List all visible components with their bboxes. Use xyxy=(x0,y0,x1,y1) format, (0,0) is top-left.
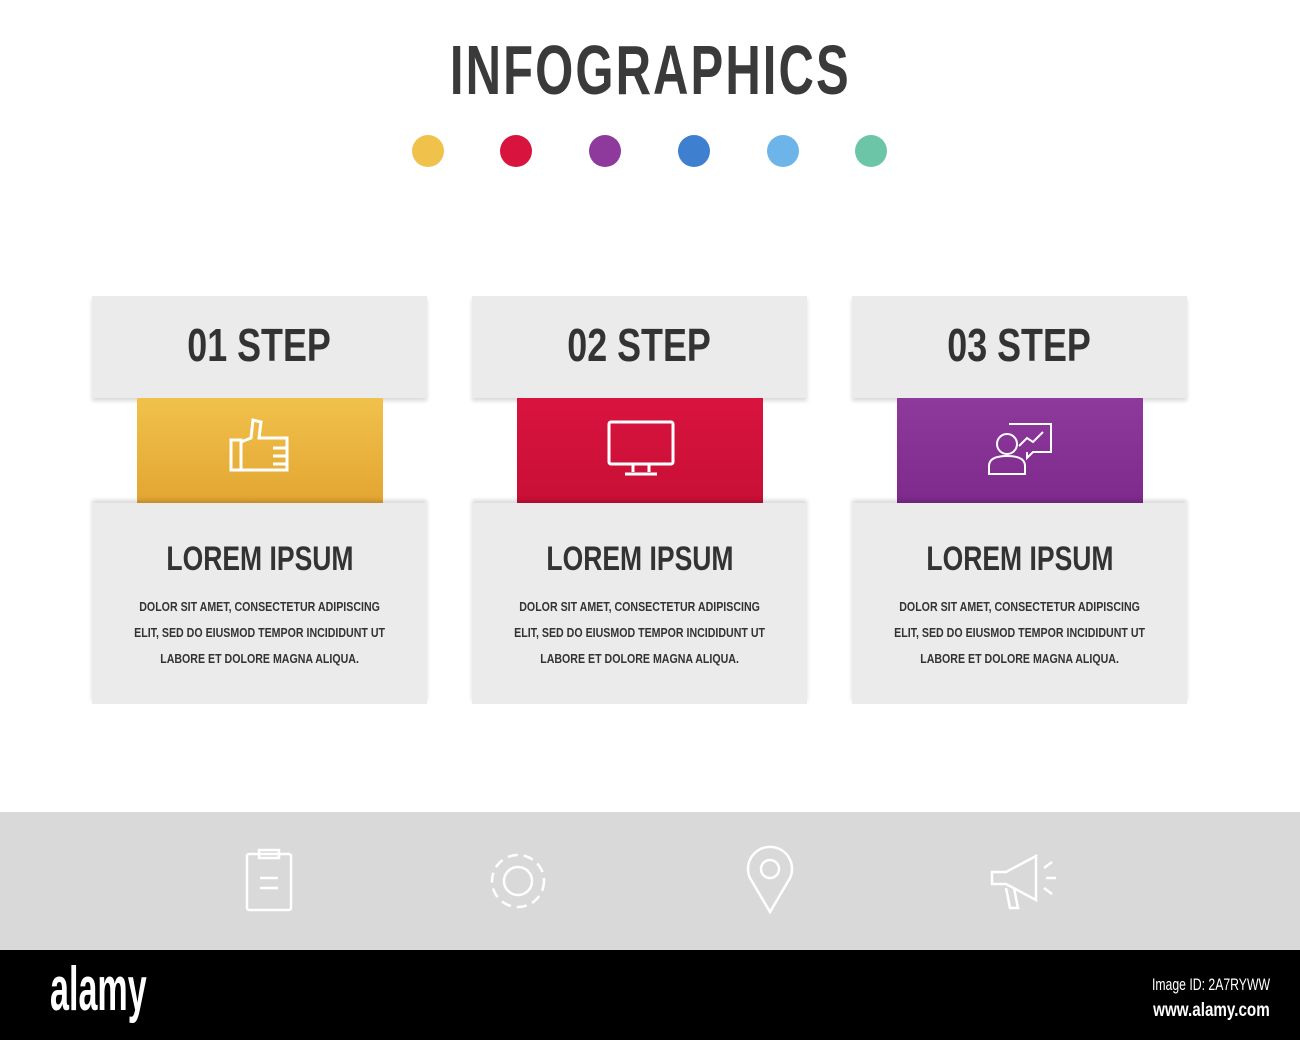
band purple xyxy=(897,398,1143,503)
heading: 03 STEP xyxy=(948,319,1091,371)
icon: gear xyxy=(492,855,544,907)
image id xyxy=(1152,975,1270,1021)
footer xyxy=(0,950,1300,1040)
icon: megaphone xyxy=(992,856,1056,908)
panel: step 2 xyxy=(470,296,808,704)
subheading: LOREM IPSUM xyxy=(546,540,733,578)
band red xyxy=(517,398,763,503)
text: LABORE ET DOLORE MAGNA ALIQUA. xyxy=(540,652,739,666)
colour dots xyxy=(412,135,887,167)
panel: step 3 xyxy=(850,296,1188,704)
text xyxy=(894,600,1145,666)
panel: step 1 xyxy=(90,296,428,704)
heading: 01 STEP xyxy=(188,319,331,371)
icon: clipboard xyxy=(247,850,291,910)
text: DOLOR SIT AMET, CONSECTETUR ADIPISCING xyxy=(139,600,380,614)
text xyxy=(514,600,765,666)
text: DOLOR SIT AMET, CONSECTETUR ADIPISCING xyxy=(519,600,760,614)
band yellow xyxy=(137,398,383,503)
subheading: LOREM IPSUM xyxy=(926,540,1113,578)
logo: alamy xyxy=(50,955,147,1024)
text: ELIT, SED DO EIUSMOD TEMPOR INCIDIDUNT UT xyxy=(514,626,765,640)
title: INFOGRAPHICS xyxy=(450,31,850,109)
subheading: LOREM IPSUM xyxy=(166,540,353,578)
text xyxy=(134,600,385,666)
image id: Image ID: 2A7RYWW xyxy=(1152,975,1270,994)
text: ELIT, SED DO EIUSMOD TEMPOR INCIDIDUNT UT xyxy=(894,626,1145,640)
image id: www.alamy.com xyxy=(1153,1000,1270,1021)
heading: 02 STEP xyxy=(568,319,711,371)
text: LABORE ET DOLORE MAGNA ALIQUA. xyxy=(920,652,1119,666)
text: DOLOR SIT AMET, CONSECTETUR ADIPISCING xyxy=(899,600,1140,614)
icon: pin xyxy=(748,847,792,912)
text: ELIT, SED DO EIUSMOD TEMPOR INCIDIDUNT UT xyxy=(134,626,385,640)
text: LABORE ET DOLORE MAGNA ALIQUA. xyxy=(160,652,359,666)
icon bar xyxy=(0,812,1300,950)
